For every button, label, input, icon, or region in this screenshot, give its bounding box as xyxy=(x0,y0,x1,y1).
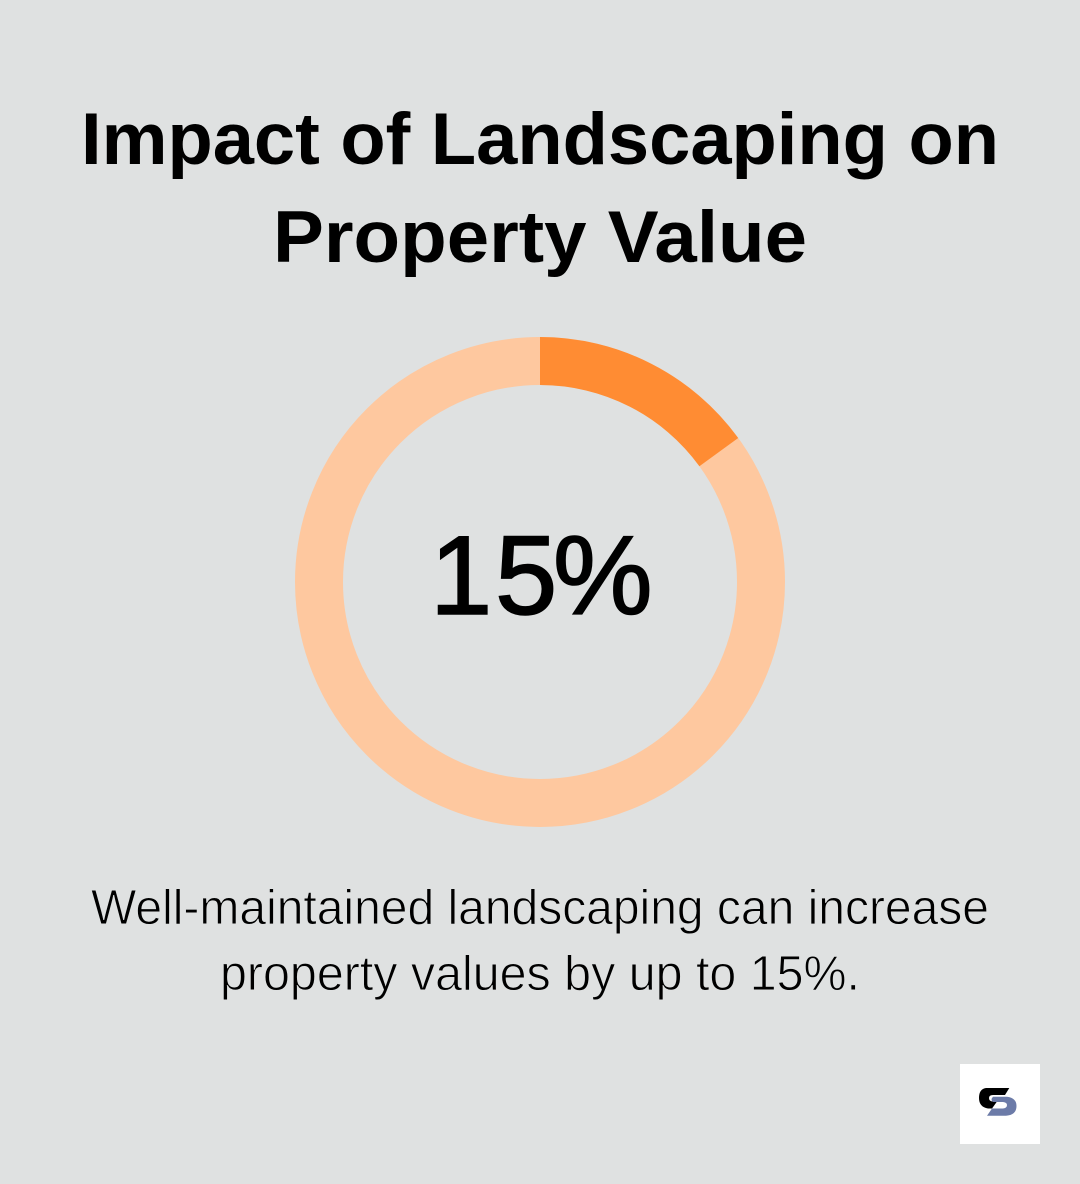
description text: Well-maintained landscaping can increase xyxy=(91,881,989,935)
chart highlighted segment xyxy=(540,337,738,466)
icon: logo top black shape xyxy=(979,1088,1009,1108)
title xyxy=(81,99,999,278)
chart center value: 15% xyxy=(430,513,653,638)
icon: logo bottom blue shape xyxy=(987,1097,1016,1116)
description text: property values by up to 15%. xyxy=(220,947,860,1001)
logo badge xyxy=(960,1064,1040,1144)
title: Property Value xyxy=(273,197,807,278)
title: Impact of Landscaping on xyxy=(81,99,999,180)
chart track xyxy=(319,361,761,803)
donut chart: 15% xyxy=(319,337,761,803)
description text xyxy=(91,881,989,1001)
